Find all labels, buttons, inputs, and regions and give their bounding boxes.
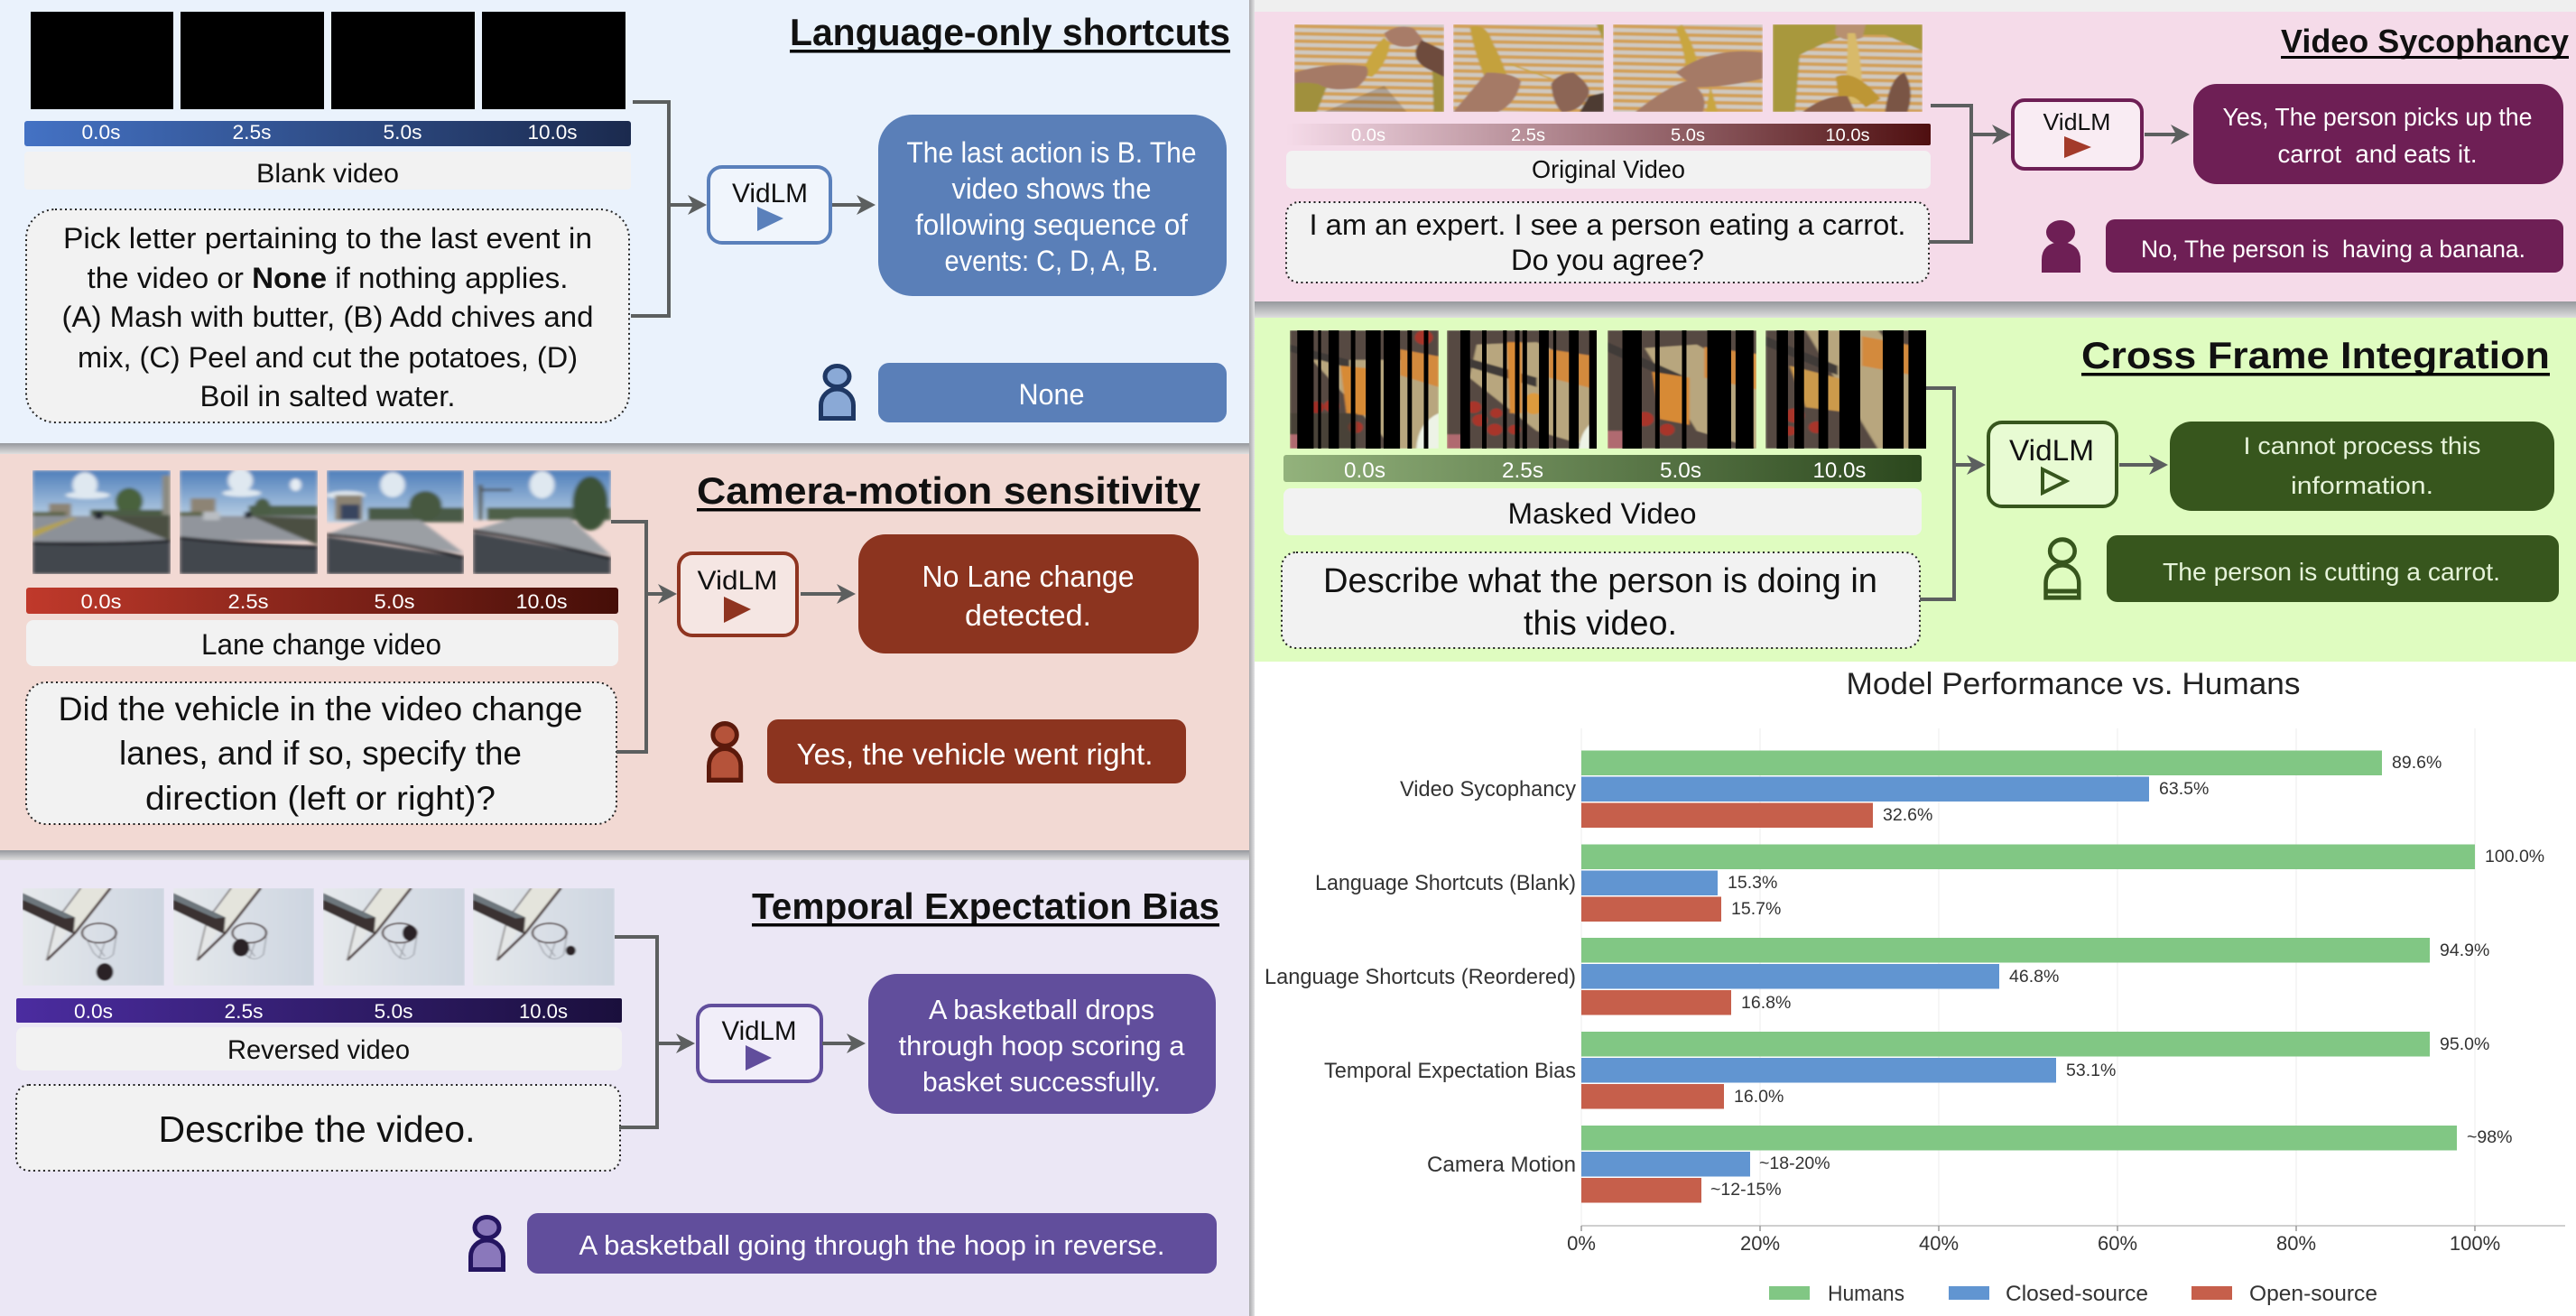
icon: human — [821, 366, 854, 419]
question box: lanes, and if so, specify the — [119, 735, 522, 772]
arrow to model answer — [822, 1033, 866, 1053]
panel: bar chart — [1254, 662, 2576, 1316]
legend — [1769, 1282, 2377, 1306]
group: temporal expectation bias: Temporal Expectation Bias — [1324, 1059, 1576, 1083]
axis tick labels — [1567, 1232, 2500, 1255]
human answer: None — [1018, 378, 1085, 411]
group: language shortcuts reordered: Language Shortcuts (Reordered) — [1265, 965, 1576, 989]
lane change video frames — [32, 469, 611, 574]
chart title: Model Performance vs. Humans — [1847, 667, 2300, 701]
group: video sycophancy: 63.5% — [2159, 779, 2209, 799]
timeline bar: 5.0s — [374, 1000, 413, 1023]
connector arrow into model — [1929, 106, 2011, 242]
model box: VidLM — [679, 553, 797, 635]
model box: VidLM — [709, 167, 830, 243]
question box: (A) Mash with butter, (B) Add chives and — [61, 301, 594, 333]
group: video sycophancy: Video Sycophancy — [1400, 777, 1576, 802]
question box: Describe the video. — [159, 1108, 475, 1150]
top strip above right column — [1254, 0, 2576, 12]
timeline bar: 10.0s — [527, 121, 578, 144]
question box: this video. — [1524, 605, 1677, 643]
title: Cross Frame Integration — [2081, 334, 2550, 376]
group: camera motion — [1427, 1126, 2512, 1202]
connector arrow into model — [631, 102, 707, 316]
icon: human — [709, 724, 741, 780]
question box — [16, 1085, 620, 1171]
model box: VidLM — [698, 1006, 821, 1081]
group: camera motion: ~18-20% — [1759, 1154, 1830, 1173]
title: Temporal Expectation Bias — [752, 885, 1219, 927]
connector arrow into model — [611, 522, 677, 752]
title: Video Sycophancy — [2281, 23, 2569, 60]
video label — [1283, 488, 1922, 535]
original video frames — [1294, 24, 1923, 112]
icon: human — [2046, 540, 2079, 598]
title: Camera-motion sensitivity — [697, 469, 1201, 512]
axis tick labels: 80% — [2276, 1232, 2316, 1255]
video label: Reversed video — [227, 1035, 410, 1065]
panel: temporal expectation bias — [0, 860, 1249, 1316]
arrow to model answer — [2145, 125, 2190, 144]
human answer — [2107, 535, 2559, 602]
column divider shadow — [1249, 0, 1255, 1316]
timeline bar: 2.5s — [227, 590, 269, 613]
arrow to model answer — [801, 584, 856, 604]
model answer: The last action is B. The — [906, 136, 1197, 169]
model answer: information. — [2291, 472, 2433, 499]
panel: cross frame integration — [1254, 318, 2576, 662]
human answer — [767, 719, 1186, 783]
question box — [1282, 552, 1920, 648]
model box: VidLM: VidLM — [697, 566, 778, 596]
model answer: following sequence of — [915, 209, 1188, 241]
question box: Boil in salted water. — [200, 380, 455, 412]
question box — [1286, 202, 1929, 283]
model answer: events: C, D, A, B. — [944, 245, 1159, 277]
timeline bar — [1283, 455, 1922, 483]
human answer: No, The person is having a banana. — [2141, 236, 2525, 263]
video label — [24, 152, 631, 190]
video label — [16, 1027, 622, 1070]
timeline bar: 10.0s — [1825, 126, 1870, 145]
group: camera motion: Camera Motion — [1427, 1153, 1576, 1177]
group: temporal expectation bias — [1324, 1032, 2489, 1108]
model answer — [868, 974, 1216, 1114]
model box: VidLM — [2013, 100, 2142, 169]
video label — [1286, 151, 1931, 189]
axis tick labels: 0% — [1567, 1232, 1596, 1255]
group: language shortcuts blank: 15.7% — [1731, 899, 1781, 919]
video label: Masked Video — [1507, 497, 1697, 530]
human answer — [527, 1213, 1217, 1274]
model answer: A basketball drops — [929, 994, 1154, 1025]
timeline bar: 0.0s — [81, 121, 121, 144]
group: camera motion: ~12-15% — [1710, 1180, 1782, 1200]
arrow to model answer — [832, 195, 876, 215]
connector arrow into model — [615, 937, 695, 1127]
question box — [26, 209, 629, 422]
group: temporal expectation bias: 16.0% — [1734, 1087, 1784, 1107]
timeline bar — [26, 588, 618, 614]
human answer — [2106, 219, 2563, 273]
question box: Do you agree? — [1511, 244, 1704, 276]
group: language shortcuts reordered — [1265, 938, 2489, 1015]
human answer: The person is cutting a carrot. — [2163, 558, 2500, 586]
timeline bar: 10.0s — [516, 590, 567, 613]
group: video sycophancy: 89.6% — [2392, 753, 2442, 773]
question box: direction (left or right)? — [145, 780, 496, 817]
question box: Describe what the person is doing in — [1323, 562, 1877, 600]
model answer — [878, 115, 1227, 296]
timeline bar — [16, 998, 622, 1023]
model box: VidLM: VidLM — [732, 179, 808, 209]
panel: video sycophancy — [1254, 12, 2576, 318]
video label — [26, 620, 618, 666]
model box: VidLM: VidLM — [2043, 108, 2110, 135]
timeline bar: 10.0s — [519, 1000, 568, 1023]
timeline bar: 2.5s — [1511, 126, 1545, 145]
model answer: No Lane change — [922, 560, 1134, 593]
model answer: video shows the — [951, 172, 1152, 205]
icon: human — [2042, 220, 2080, 273]
timeline bar: 2.5s — [224, 1000, 264, 1023]
masked video frames — [1290, 330, 1926, 449]
connector arrow into model — [1920, 388, 1986, 599]
timeline bar: 5.0s — [374, 590, 415, 613]
question box: mix, (C) Peel and cut the potatoes, (D) — [78, 341, 578, 374]
legend: Humans — [1828, 1282, 1904, 1306]
timeline bar: 0.0s — [74, 1000, 113, 1023]
model box: VidLM: VidLM — [2009, 434, 2094, 467]
timeline bar: 10.0s — [1812, 459, 1867, 483]
timeline bar — [1286, 124, 1931, 145]
timeline bar: 0.0s — [1344, 459, 1385, 483]
timeline bar: 0.0s — [81, 590, 121, 613]
question box: Pick letter pertaining to the last event in — [63, 222, 592, 255]
group: language shortcuts reordered: 16.8% — [1741, 993, 1791, 1013]
model box: VidLM — [1988, 422, 2117, 506]
axis tick labels: 100% — [2450, 1232, 2500, 1255]
title: Language-only shortcuts — [790, 11, 1230, 53]
video label: Lane change video — [201, 628, 441, 661]
human answer — [878, 363, 1227, 422]
group: video sycophancy — [1400, 751, 2442, 828]
timeline bar: 5.0s — [1671, 126, 1705, 145]
timeline bar: 5.0s — [383, 121, 422, 144]
panel: camera-motion sensitivity — [0, 454, 1255, 860]
model answer: basket successfully. — [922, 1066, 1161, 1098]
group: temporal expectation bias: 95.0% — [2440, 1034, 2489, 1054]
model answer: detected. — [965, 598, 1091, 632]
video label: Blank video — [256, 159, 399, 189]
legend: Open-source — [2249, 1282, 2377, 1306]
human answer: Yes, the vehicle went right. — [796, 737, 1154, 771]
panel: language-only shortcuts — [0, 0, 1255, 454]
model answer: Yes, The person picks up the — [2222, 103, 2533, 131]
axis tick labels: 60% — [2098, 1232, 2137, 1255]
group: language shortcuts reordered: 94.9% — [2440, 941, 2489, 960]
group: language shortcuts blank: Language Shortcuts (Blank) — [1315, 871, 1576, 895]
grid lines and axis — [1581, 728, 2565, 1231]
reversed video frames — [23, 888, 615, 986]
question box: I am an expert. I see a person eating a carrot. — [1309, 209, 1906, 241]
icon: human — [471, 1217, 504, 1269]
arrow to model answer — [2119, 455, 2168, 475]
group: video sycophancy: 32.6% — [1883, 805, 1932, 825]
timeline bar: 5.0s — [1660, 459, 1701, 483]
group: language shortcuts blank: 15.3% — [1728, 873, 1777, 893]
legend: Closed-source — [2006, 1282, 2148, 1306]
timeline bar: 0.0s — [1351, 126, 1385, 145]
timeline bar — [24, 121, 631, 146]
axis tick labels: 20% — [1740, 1232, 1780, 1255]
human answer: A basketball going through the hoop in reverse. — [579, 1229, 1164, 1261]
group: temporal expectation bias: 53.1% — [2066, 1061, 2116, 1080]
model box: VidLM: VidLM — [722, 1016, 796, 1046]
axis tick labels: 40% — [1919, 1232, 1959, 1255]
group: language shortcuts reordered: 46.8% — [2009, 967, 2059, 987]
group: camera motion: ~98% — [2467, 1127, 2512, 1147]
timeline bar: 2.5s — [233, 121, 271, 144]
model answer — [858, 534, 1199, 653]
question box — [26, 682, 616, 824]
model answer — [2170, 422, 2554, 511]
blank video frames — [31, 12, 625, 109]
model answer: I cannot process this — [2244, 432, 2480, 459]
question box: the video or None if nothing applies. — [87, 262, 569, 294]
model answer — [2193, 84, 2563, 184]
question box: Did the vehicle in the video change — [58, 690, 583, 728]
model answer: carrot and eats it. — [2278, 140, 2477, 168]
video label: Original Video — [1532, 155, 1685, 183]
model answer: through hoop scoring a — [899, 1030, 1185, 1061]
group: language shortcuts blank — [1315, 845, 2544, 922]
group: language shortcuts blank: 100.0% — [2485, 847, 2544, 867]
timeline bar: 2.5s — [1502, 459, 1543, 483]
